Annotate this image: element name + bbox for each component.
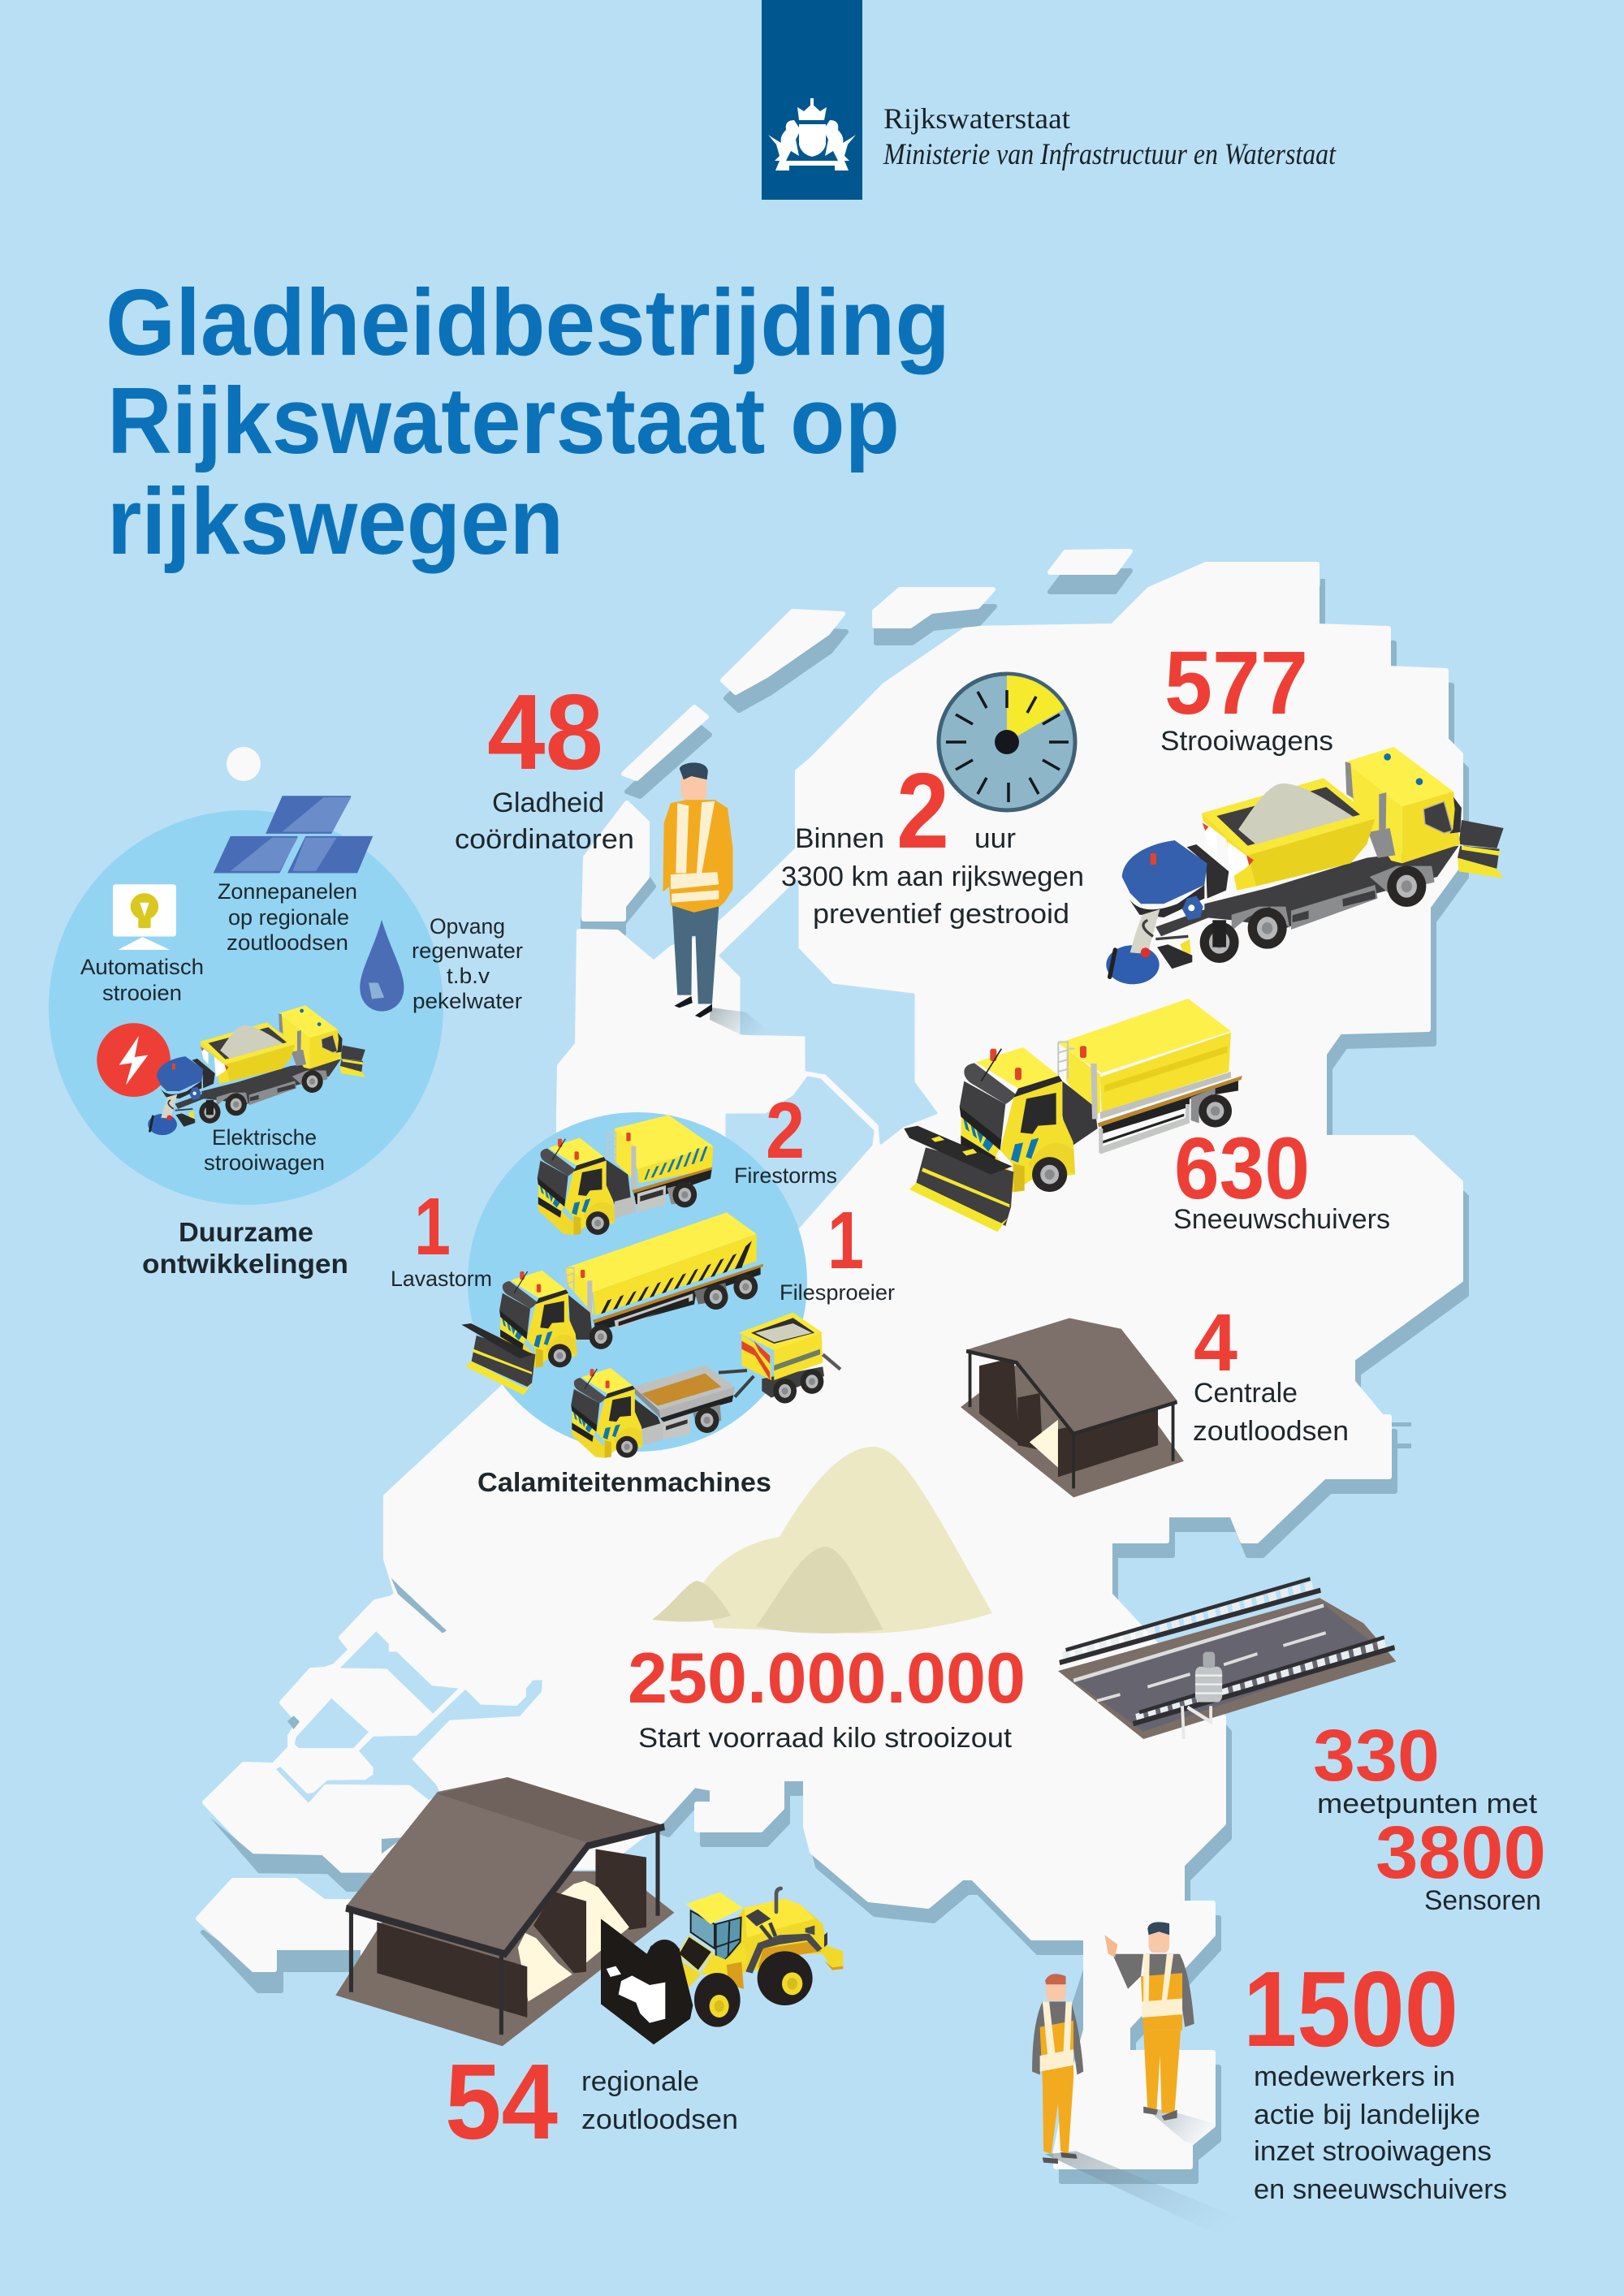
icon: coat of arms (768, 98, 856, 170)
sneeuwschuiver truck (904, 999, 1242, 1232)
salt piles (652, 1447, 992, 1634)
ministry name: Rijkswaterstaat (883, 102, 1070, 135)
stat: 250.000.000: Start voorraad kilo strooizout (638, 1723, 1013, 1754)
lavastorm truck with plow (461, 1212, 763, 1395)
text: sustainability labels: op regionale (228, 905, 349, 930)
calamity vehicles (461, 1115, 840, 1458)
panel: calamiteitenmachines circle (468, 1112, 807, 1452)
islands: Wadden (624, 551, 1130, 796)
stat: 4 central salt sheds: Centrale (1194, 1378, 1298, 1409)
worker pointing (1104, 1922, 1194, 2121)
filesproeier truck and trailer (571, 1313, 840, 1458)
stat: within 2 hours: preventief gestrooid (813, 899, 1069, 930)
island: Zeeuws-Vlaanderen (198, 1880, 378, 1991)
stat: 630 sneeuwschuivers: 630 (1174, 1119, 1310, 1217)
stat: 250.000.000 (628, 1638, 1026, 1754)
heading: duurzame ontwikkelingen: Duurzame (179, 1217, 313, 1247)
stat: within 2 hours (781, 751, 1084, 930)
stat: within 2 hours: uur (974, 823, 1016, 854)
text: sustainability labels: regenwater (412, 939, 523, 963)
heading: duurzame ontwikkelingen (142, 1217, 348, 1279)
stat: 577 strooiwagens: 577 (1164, 633, 1308, 733)
stat: 330 meetpunten 3800 sensoren: meetpunten met (1317, 1789, 1538, 1819)
stat: filesproeier: 1 (827, 1195, 864, 1286)
stat: firestorms (734, 1085, 837, 1188)
title: Gladheidbestrijding (106, 270, 950, 375)
stat: 1500 medewerkers: actie bij landelijke (1254, 2100, 1480, 2130)
stat: 1500 medewerkers: 1500 (1243, 1949, 1458, 2069)
text: sustainability labels (80, 879, 523, 1175)
stat: within 2 hours: 3300 km aan rijkswegen (781, 861, 1084, 892)
ministry name: Ministerie van Infrastructuur en Waterstaat (883, 138, 1337, 171)
firestorm truck (538, 1115, 713, 1235)
stat: 54 regional salt sheds (445, 2042, 738, 2161)
stat: 1500 medewerkers (1243, 1949, 1507, 2205)
text: sustainability labels: Opvang (430, 914, 505, 939)
strooiwagen truck (1106, 747, 1504, 984)
stat: 577 strooiwagens (1160, 633, 1333, 757)
stat: 48 coordinators: 48 (487, 672, 603, 792)
stat: 577 strooiwagens: Strooiwagens (1160, 726, 1333, 757)
sustainability icons (97, 796, 404, 1097)
icon: gauge clock (939, 674, 1075, 810)
stat: 48 coordinators (455, 672, 634, 855)
regional salt shed (335, 1777, 674, 2046)
text: sustainability labels: strooiwagen (204, 1150, 325, 1175)
icon: lightning bolt (97, 1023, 171, 1097)
stat: 1500 medewerkers: en sneeuwschuivers (1254, 2174, 1507, 2205)
worker standing (1032, 1974, 1083, 2164)
wheel loader (601, 1888, 843, 2044)
stat: filesproeier: Filesproeier (780, 1280, 895, 1305)
stat: 48 coordinators: Gladheid (492, 788, 604, 818)
map of the Netherlands (198, 551, 1466, 2182)
ministry name (883, 102, 1337, 171)
stat: lavastorm: 1 (414, 1181, 451, 1272)
stat: firestorms: Firestorms (734, 1163, 837, 1188)
stat: firestorms: 2 (766, 1085, 805, 1175)
stat: 250.000.000: 250.000.000 (628, 1638, 1026, 1718)
stat: 48 coordinators: coördinatoren (455, 824, 634, 855)
text: sustainability labels: pekelwater (412, 989, 522, 1013)
text: sustainability labels: strooien (102, 981, 182, 1005)
stat: lavastorm: Lavastorm (391, 1267, 492, 1291)
stat: 330 meetpunten 3800 sensoren: 3800 (1376, 1811, 1546, 1894)
stat: 630 sneeuwschuivers (1173, 1119, 1390, 1235)
text: sustainability labels: t.b.v (447, 964, 490, 988)
stat: lavastorm (391, 1181, 492, 1291)
map shadow (574, 579, 1466, 2182)
workers (1032, 1922, 1278, 2233)
stat: 54 regional salt sheds: regionale (581, 2066, 699, 2097)
Zeeland waters and shadows (209, 1577, 542, 1892)
east coast jetties (1387, 1422, 1411, 1448)
icon: solar panels (214, 796, 373, 873)
panel: duurzame ontwikkelingen circle (49, 747, 443, 1205)
stat: 54 regional salt sheds: 54 (445, 2042, 558, 2161)
stat: within 2 hours: 2 (896, 751, 949, 870)
text: sustainability labels: Elektrische (212, 1125, 317, 1150)
road with sensor (1058, 1579, 1396, 1739)
title: rijkswegen (107, 468, 564, 574)
title: Rijkswaterstaat op (107, 368, 900, 473)
central salt shed (961, 1318, 1184, 1497)
logo band (762, 0, 862, 200)
stat: filesproeier (780, 1195, 895, 1305)
electric truck (148, 1005, 365, 1135)
text: sustainability labels: zoutloodsen (227, 930, 348, 955)
stat: 54 regional salt sheds: zoutloodsen (581, 2104, 738, 2135)
icon: small sun dot (227, 747, 261, 781)
icon: water drop (360, 920, 404, 1012)
icon: monitor with bulb (113, 884, 176, 950)
person: coordinator (663, 762, 780, 1039)
text: sustainability labels: Automatisch (80, 955, 204, 979)
stat: 330 meetpunten 3800 sensoren: 330 (1313, 1716, 1440, 1797)
stat: 1500 medewerkers: inzet strooiwagens (1254, 2136, 1492, 2167)
stat: 4 central salt sheds (1193, 1297, 1349, 1447)
inland sea water (720, 881, 936, 1143)
stat: 1500 medewerkers: medewerkers in (1254, 2061, 1455, 2092)
title (106, 270, 950, 574)
stat: 330 meetpunten 3800 sensoren: Sensoren (1424, 1885, 1541, 1916)
heading: calamiteitenmachines: Calamiteitenmachines (477, 1467, 771, 1497)
stat: 4 central salt sheds: zoutloodsen (1193, 1416, 1349, 1447)
text: sustainability labels: Zonnepanelen (218, 879, 357, 904)
stat: 4 central salt sheds: 4 (1194, 1297, 1237, 1388)
stat: 630 sneeuwschuivers: Sneeuwschuivers (1173, 1204, 1390, 1235)
stat: within 2 hours: Binnen (795, 823, 884, 854)
heading: duurzame ontwikkelingen: ontwikkelingen (142, 1249, 348, 1279)
North Holland top (584, 803, 647, 919)
main land (205, 564, 1461, 2167)
stat: 330 meetpunten 3800 sensoren (1313, 1716, 1546, 1916)
